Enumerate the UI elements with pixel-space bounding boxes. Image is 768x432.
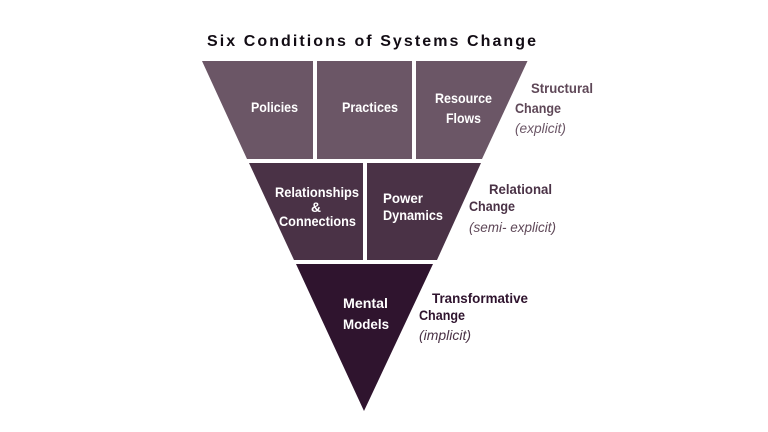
label: transformative change: Change	[419, 307, 465, 323]
panel: relationships and connections: Connections	[279, 213, 356, 229]
panel: mental models	[296, 264, 433, 411]
label: relational change	[469, 181, 556, 235]
panel: policies	[202, 61, 313, 159]
panel: mental models: Mental	[343, 295, 388, 311]
panel: practices: Practices	[342, 99, 398, 115]
panel: structural change row	[202, 61, 528, 159]
panel: power dynamics: Power	[383, 190, 424, 206]
panel: resource flows: Resource	[435, 90, 492, 106]
label: relational change: (semi- explicit)	[469, 219, 556, 235]
label: structural change: (explicit)	[515, 120, 566, 136]
label: structural change: Structural	[531, 80, 593, 96]
title: Six Conditions of Systems Change	[207, 33, 536, 50]
label: transformative change	[419, 290, 528, 343]
panel: practices	[317, 61, 412, 159]
panel: resource flows	[416, 61, 528, 159]
label: relational change: Relational	[489, 181, 552, 197]
label: transformative change: Transformative	[432, 290, 528, 306]
panel: power dynamics: Dynamics	[383, 207, 443, 223]
panel: resource flows: Flows	[446, 110, 481, 126]
panel: relationships and connections: &	[311, 199, 321, 215]
label: structural change: Change	[515, 100, 561, 116]
panel: relationships and connections	[249, 163, 363, 260]
label: structural change	[515, 80, 593, 136]
panel: relationships and connections: Relationships	[275, 184, 359, 200]
label: transformative change: (implicit)	[419, 327, 471, 343]
label: relational change: Change	[469, 198, 515, 214]
panel: power dynamics	[367, 163, 481, 260]
panel: policies: Policies	[251, 99, 298, 115]
panel: mental models: Models	[343, 316, 389, 332]
panel: relational change row	[249, 163, 481, 260]
